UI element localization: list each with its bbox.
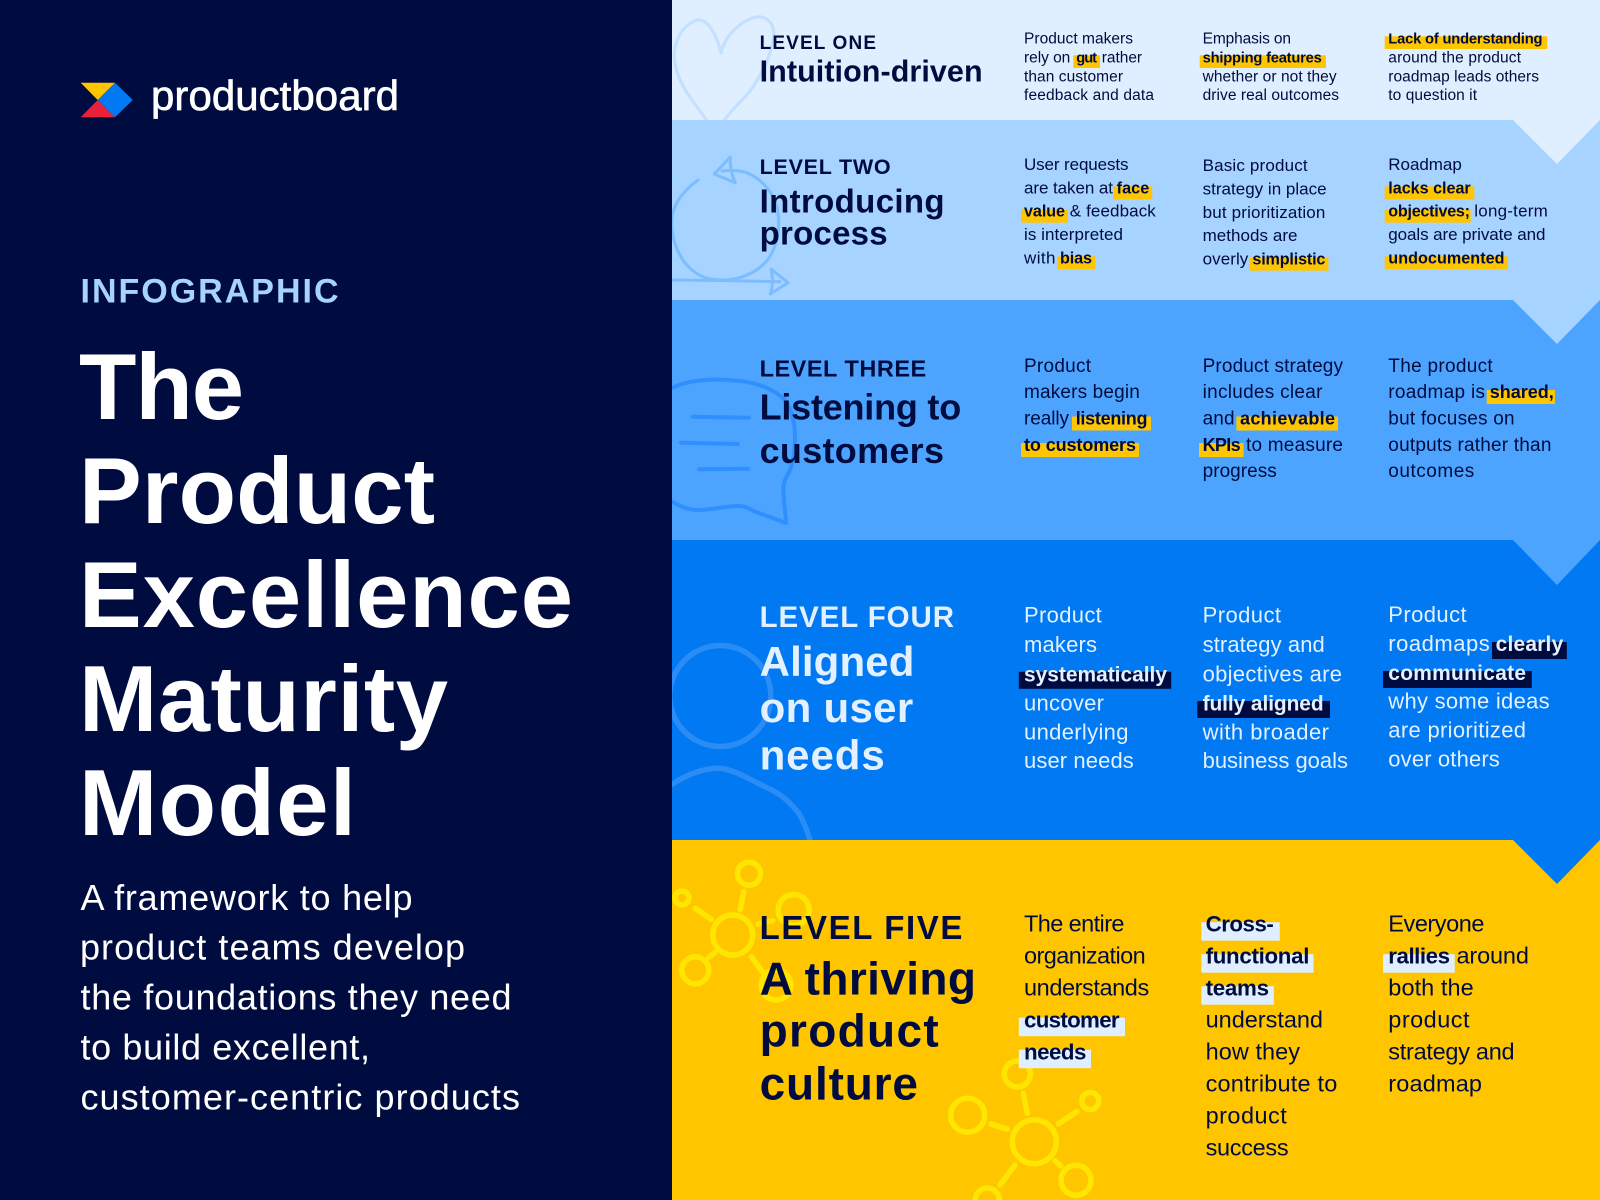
heading: level two: process — [760, 214, 888, 252]
text: level two column 2: Basic product — [1203, 156, 1308, 175]
text: level four column 3: over others — [1388, 746, 1500, 772]
text: level two column 3: objectives; — [1388, 203, 1470, 221]
text: level five column 1: The entire — [1024, 910, 1124, 936]
text: level two column 3: goals are private and — [1388, 225, 1546, 244]
arrow: level one pointer — [1513, 120, 1600, 164]
text: level one column 2: whether or not they — [1202, 68, 1337, 85]
heading: level five — [760, 909, 976, 1109]
icon: user outline — [670, 646, 810, 840]
text: level four column 3: are prioritized — [1388, 718, 1526, 743]
heading: level two — [760, 155, 945, 252]
heading: level four: on user — [760, 684, 913, 731]
text: level four column 3: clearly — [1496, 633, 1564, 656]
icon: heart — [674, 17, 774, 120]
panel: level two — [672, 120, 1600, 300]
text: level five column 2: understand — [1206, 1006, 1323, 1032]
heading: level four: needs — [760, 731, 885, 778]
text: level three column 1: to customers — [1024, 435, 1136, 455]
heading: level one — [760, 33, 983, 89]
text: level two column 3: undocumented — [1388, 249, 1504, 267]
logo: productboard: productboard — [151, 72, 399, 119]
text: level four column 2: strategy and — [1203, 632, 1325, 657]
text: level five column 1: understands — [1024, 974, 1149, 1000]
text: level three column 2: KPIs — [1203, 435, 1241, 455]
text: level one column 2 — [1200, 30, 1339, 104]
icon: network bottom centre — [951, 1061, 1099, 1200]
text: level three column 3: outputs rather than — [1388, 435, 1551, 456]
text: level three column 3: The product — [1388, 356, 1493, 377]
text: level five column 3: around — [1456, 942, 1529, 968]
heading: level five: culture — [760, 1057, 918, 1109]
text: level three column 2: progress — [1203, 461, 1277, 482]
text: level three column 3: roadmap is — [1388, 382, 1485, 403]
text: level four column 2: fully aligned — [1203, 692, 1324, 715]
text: level two column 2 — [1203, 156, 1328, 271]
text: level four column 1 — [1019, 603, 1171, 773]
text: level five column 2: contribute to — [1206, 1070, 1337, 1096]
text: level four column 1: Product — [1024, 603, 1102, 628]
text: level four column 1: uncover — [1024, 690, 1104, 715]
text: level two column 1: is interpreted — [1024, 225, 1123, 244]
text: level two column 2: but prioritization — [1203, 203, 1325, 222]
heading: level two: Introducing — [760, 182, 945, 220]
heading: level three — [760, 356, 961, 471]
text: level four column 1: underlying — [1024, 720, 1128, 744]
heading: level one: Intuition-driven — [760, 55, 983, 89]
text: level two column 1: face — [1117, 179, 1149, 197]
text: level five column 2: success — [1206, 1134, 1289, 1160]
heading: level five: product — [760, 1005, 939, 1057]
text: level three column 1: really — [1024, 408, 1070, 430]
text: level five column 3: product — [1388, 1006, 1470, 1032]
text: level three column 3: outcomes — [1388, 461, 1474, 482]
text: level five column 3: rallies — [1388, 944, 1450, 968]
text: level two column 3: lacks clear — [1388, 179, 1471, 197]
text: level four column 3: communicate — [1388, 662, 1526, 685]
heading: level four: LEVEL FOUR — [760, 601, 954, 634]
text: level two column 1: with — [1023, 248, 1056, 267]
text: level two column 3: long-term — [1474, 202, 1548, 221]
text: level one column 1: rather — [1102, 49, 1142, 66]
arrow: level two pointer — [1513, 300, 1600, 344]
text: level four column 1: user needs — [1024, 748, 1134, 773]
text: level five column 3: both the — [1388, 974, 1474, 1000]
heading: level four: Aligned — [760, 638, 914, 685]
text: level two column 1 — [1021, 155, 1156, 269]
title: Maturity — [79, 646, 448, 751]
text: level five column 2: Cross- — [1206, 912, 1274, 936]
text: level four column 2: with broader — [1202, 720, 1329, 744]
text: level three column 1: Product — [1024, 356, 1092, 377]
text: level one column 1 — [1024, 30, 1154, 104]
text: level three column 3 — [1388, 356, 1555, 482]
text: level four column 1: systematically — [1024, 663, 1167, 686]
text: level five column 2: how they — [1206, 1038, 1300, 1064]
text: level five column 2: functional — [1206, 944, 1309, 968]
arrow: level four pointer — [1513, 840, 1600, 884]
text: level three column 3: but focuses on — [1388, 408, 1515, 430]
text: level five column 3: strategy and — [1388, 1038, 1515, 1064]
text: level four column 2: objectives are — [1203, 661, 1342, 686]
icon: cycle arrows — [672, 157, 788, 294]
text: level three column 2: and — [1203, 408, 1235, 430]
text: level one column 1: feedback and data — [1024, 87, 1154, 104]
text: level one column 3: to question it — [1388, 87, 1478, 104]
text: level five column 3: roadmap — [1388, 1070, 1482, 1096]
text: level five column 3 — [1383, 910, 1529, 1096]
icon: network top left — [675, 862, 809, 1000]
text: level one column 1: than customer — [1024, 68, 1123, 85]
text: level five column 1: customer — [1024, 1008, 1120, 1032]
text: level five column 1 — [1019, 910, 1149, 1068]
text: level two column 1: bias — [1060, 249, 1092, 267]
text: level four column 2: Product — [1203, 603, 1281, 628]
text: level four column 1: makers — [1024, 632, 1097, 657]
text: level four column 3: roadmaps — [1388, 631, 1490, 656]
text: level three column 2: to measure — [1246, 435, 1343, 456]
text: level two column 1: value — [1024, 203, 1065, 221]
heading: level three: customers — [760, 430, 944, 471]
text: level five column 1: organization — [1024, 942, 1146, 968]
text: level two column 2: overly — [1203, 250, 1249, 269]
text: level three column 3: shared, — [1490, 382, 1554, 402]
heading: level five: A thriving — [760, 952, 976, 1004]
title: The — [79, 334, 244, 439]
subtitle: A framework to help — [80, 877, 412, 918]
text: level three column 1: listening — [1076, 408, 1148, 428]
panel: level five — [672, 840, 1600, 1200]
text: level three column 2: Product strategy — [1203, 356, 1344, 377]
text: level two column 2: strategy in place — [1203, 180, 1327, 199]
title: Model — [79, 750, 356, 855]
heading: level one: LEVEL ONE — [760, 33, 876, 54]
text: level five column 2 — [1201, 912, 1337, 1160]
title — [79, 334, 573, 855]
text: level two column 2: simplistic — [1252, 251, 1325, 269]
text: level three column 1 — [1021, 356, 1151, 457]
text: level five column 2: product — [1206, 1102, 1287, 1128]
text: level five column 2: teams — [1206, 976, 1269, 1000]
text: level one column 3: roadmap leads others — [1388, 68, 1539, 85]
subtitle: to build excellent, — [80, 1026, 370, 1067]
text: level two column 3 — [1385, 155, 1548, 269]
text: level three column 2 — [1199, 356, 1344, 482]
text: level one column 2: drive real outcomes — [1203, 87, 1339, 104]
subtitle: customer-centric products — [80, 1076, 520, 1117]
panel: level one — [672, 0, 1600, 120]
heading: level five: LEVEL FIVE — [760, 909, 962, 946]
text: level five column 3: Everyone — [1388, 910, 1484, 936]
text: level one column 2: shipping features — [1203, 50, 1322, 66]
text: level five column 1: needs — [1024, 1040, 1086, 1064]
panel: level four — [670, 540, 1600, 840]
label: infographic: INFOGRAPHIC — [80, 273, 338, 311]
text: level one column 1: gut — [1076, 50, 1097, 66]
text: level one column 3: around the product — [1388, 49, 1522, 66]
text: level four column 3: why some ideas — [1387, 689, 1550, 714]
heading: level three: Listening to — [760, 386, 961, 427]
icon: speech bubble — [672, 380, 795, 523]
text: level three column 1: makers begin — [1024, 382, 1140, 403]
arrow: level three pointer — [1513, 540, 1600, 585]
text: level four column 3: Product — [1388, 602, 1467, 627]
text: level two column 1: are taken at — [1024, 178, 1113, 197]
subtitle — [80, 877, 520, 1117]
text: level three column 2: achievable — [1240, 408, 1335, 428]
text: level two column 1: User requests — [1024, 155, 1128, 174]
text: level one column 1: rely on — [1024, 49, 1070, 66]
text: level one column 3: Lack of understanding — [1388, 31, 1542, 47]
heading: level three: LEVEL THREE — [760, 356, 926, 382]
heading: level four — [760, 601, 954, 778]
text: level one column 1: Product makers — [1024, 30, 1133, 47]
title: Excellence — [79, 542, 573, 647]
panel: left intro — [0, 0, 672, 1200]
heading: level two: LEVEL TWO — [760, 155, 891, 179]
subtitle: product teams develop — [80, 926, 465, 967]
text: level two column 3: Roadmap — [1388, 155, 1462, 174]
text: level two column 1: & feedback — [1070, 202, 1156, 221]
text: level two column 2: methods are — [1203, 226, 1298, 245]
subtitle: the foundations they need — [80, 976, 512, 1017]
text: level four column 3 — [1383, 602, 1567, 772]
text: level four column 2: business goals — [1203, 748, 1348, 773]
text: level four column 2 — [1197, 603, 1348, 773]
text: level three column 2: includes clear — [1203, 382, 1323, 403]
panel: level three — [672, 300, 1600, 540]
title: Product — [79, 438, 435, 543]
text: level one column 3 — [1385, 31, 1547, 104]
text: level one column 2: Emphasis on — [1203, 30, 1291, 47]
